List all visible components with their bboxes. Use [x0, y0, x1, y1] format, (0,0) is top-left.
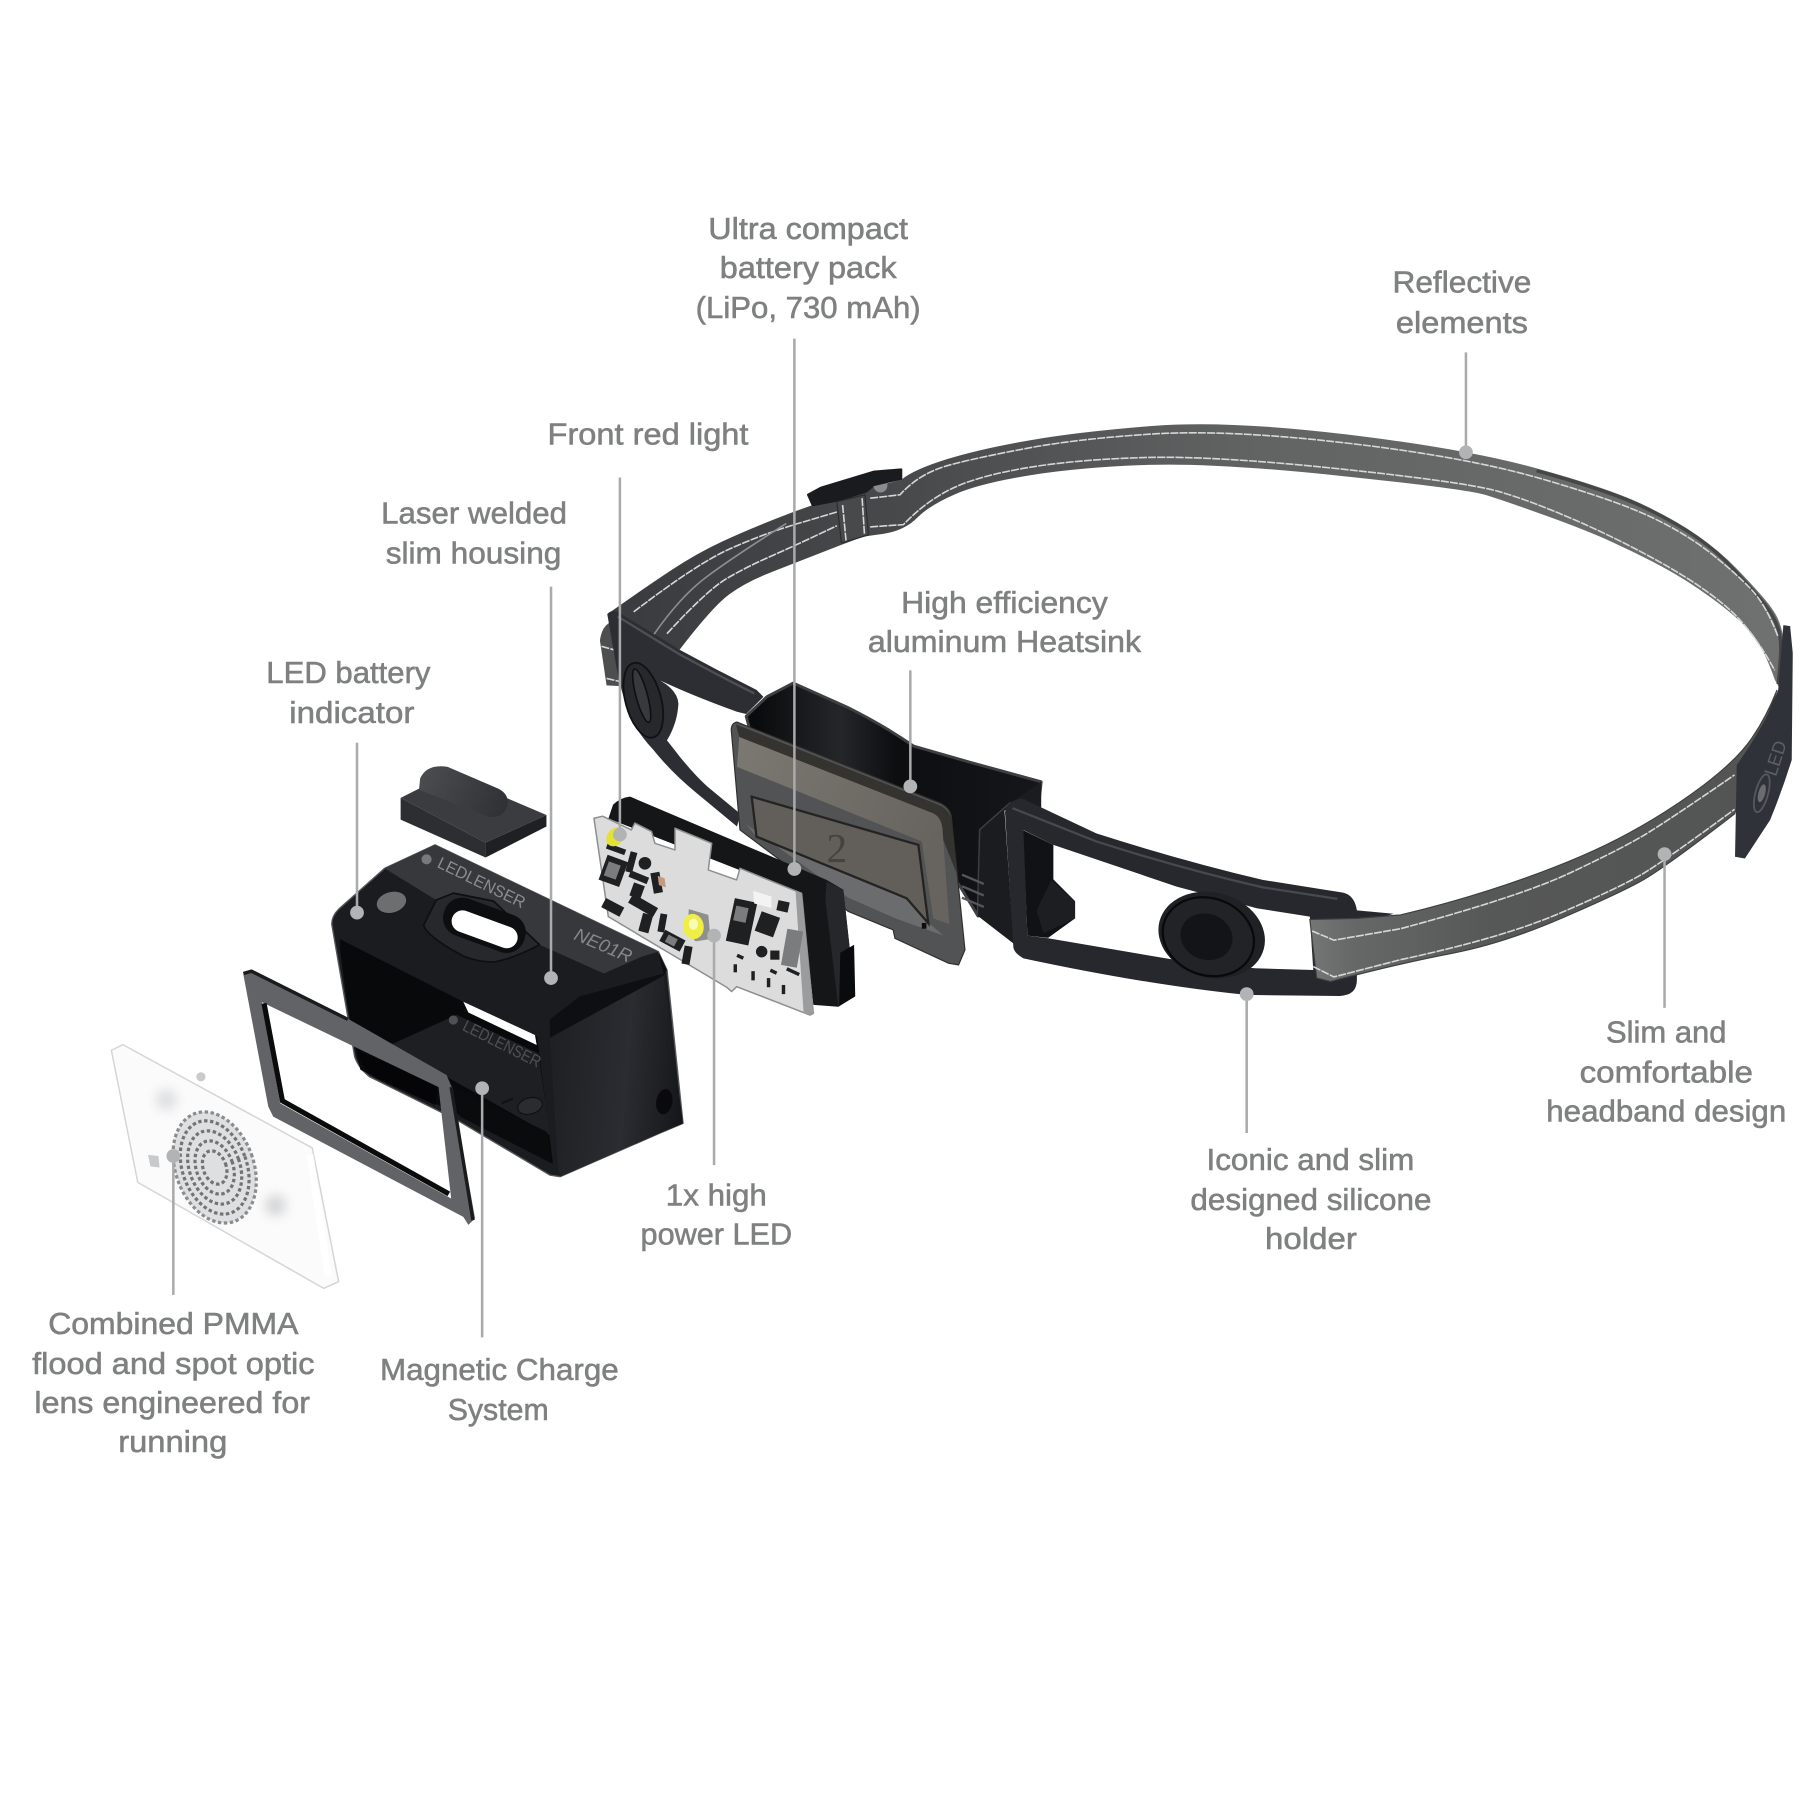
callout: Ultra compact battery pack: (LiPo, 730 mAh)	[696, 290, 921, 325]
headband: logo tag: LED	[1760, 738, 1791, 778]
callout: Front red light	[548, 416, 749, 841]
callout: 1x high power LED: 1x high	[666, 1177, 767, 1212]
housing opening	[340, 939, 553, 1163]
rubber button cap	[401, 766, 546, 858]
callout: Combined PMMA lens: running	[118, 1424, 227, 1459]
callout: Reflective elements: Reflective	[1392, 265, 1531, 300]
LEDLENSER brand on top: LEDLENSER	[434, 853, 528, 912]
callout: Iconic and slim designed silicone holder	[1190, 987, 1432, 1256]
callout: LED battery indicator: LED battery	[266, 655, 431, 690]
callout: Iconic and slim designed silicone holder: designed silicone	[1190, 1182, 1432, 1217]
headband: adjuster buckle and loop	[808, 470, 901, 543]
callout: Ultra compact battery pack: Ultra compact	[708, 211, 908, 246]
side hole	[654, 1088, 674, 1116]
callout: 1x high power LED: power LED	[641, 1216, 792, 1251]
callout: Combined PMMA lens: Combined PMMA	[48, 1306, 299, 1341]
aluminum heatsink plate with number 2	[731, 722, 965, 965]
right silicone holder	[1005, 798, 1394, 996]
callout: LED battery indicator	[266, 655, 431, 920]
left silicone holder	[600, 611, 763, 827]
callout: Combined PMMA lens	[32, 1149, 315, 1459]
callout: Combined PMMA lens: flood and spot optic	[32, 1346, 315, 1381]
heatsink pocket and rear block	[746, 683, 1041, 944]
inner floor with slot	[363, 1015, 550, 1135]
callout: Slim and comfortable headband design	[1546, 847, 1786, 1129]
callout: Magnetic Charge System: Magnetic Charge	[380, 1352, 619, 1387]
slot opening	[449, 907, 521, 951]
LED indicator window	[374, 888, 409, 917]
callout: Iconic and slim designed silicone holder: Iconic and slim	[1207, 1142, 1414, 1177]
callout: High efficiency aluminum Heatsink	[868, 585, 1142, 793]
callout: Laser welded slim housing	[381, 495, 567, 985]
callout: Iconic and slim designed silicone holder: holder	[1265, 1221, 1357, 1256]
housing	[332, 845, 683, 1177]
headband: upper strap	[607, 424, 1784, 690]
callout: Slim and comfortable headband design: headband design	[1546, 1094, 1786, 1129]
headband: lower strap	[1310, 690, 1777, 982]
callout: 1x high power LED	[641, 929, 792, 1251]
callout: High efficiency aluminum Heatsink: aluminum Heatsink	[868, 624, 1142, 659]
optic lens	[111, 1045, 339, 1288]
top slot tab	[424, 893, 540, 962]
callout: Ultra compact battery pack: battery pack	[720, 250, 897, 285]
callout: Reflective elements	[1392, 265, 1531, 459]
LEDLENSER brand inside: LEDLENSER	[460, 1016, 544, 1071]
callout: Laser welded slim housing: Laser welded	[381, 495, 567, 530]
callout: LED battery indicator: indicator	[289, 695, 414, 730]
callout: Combined PMMA lens: lens engineered for	[34, 1385, 310, 1420]
circuit board with LEDs	[594, 816, 813, 1015]
callout: High efficiency aluminum Heatsink: High efficiency	[901, 585, 1108, 620]
callout: Magnetic Charge System	[380, 1081, 619, 1427]
callout: Magnetic Charge System: System	[448, 1392, 549, 1427]
battery pack	[608, 797, 855, 1007]
headband: logo tag	[1735, 625, 1793, 858]
callout: Ultra compact battery pack	[696, 211, 921, 876]
NE01R model mark: NE01R	[571, 923, 635, 966]
callout: Reflective elements: elements	[1396, 305, 1528, 340]
slot recess	[438, 892, 531, 958]
callout: Slim and comfortable headband design: comfortable	[1580, 1055, 1753, 1090]
callout: Front red light: Front red light	[548, 416, 749, 451]
gasket frame	[243, 971, 475, 1225]
callout: Slim and comfortable headband design: Slim and	[1606, 1014, 1727, 1049]
callout: Laser welded slim housing: slim housing	[386, 536, 561, 571]
aluminum heatsink plate with number 2: 2	[827, 825, 847, 871]
